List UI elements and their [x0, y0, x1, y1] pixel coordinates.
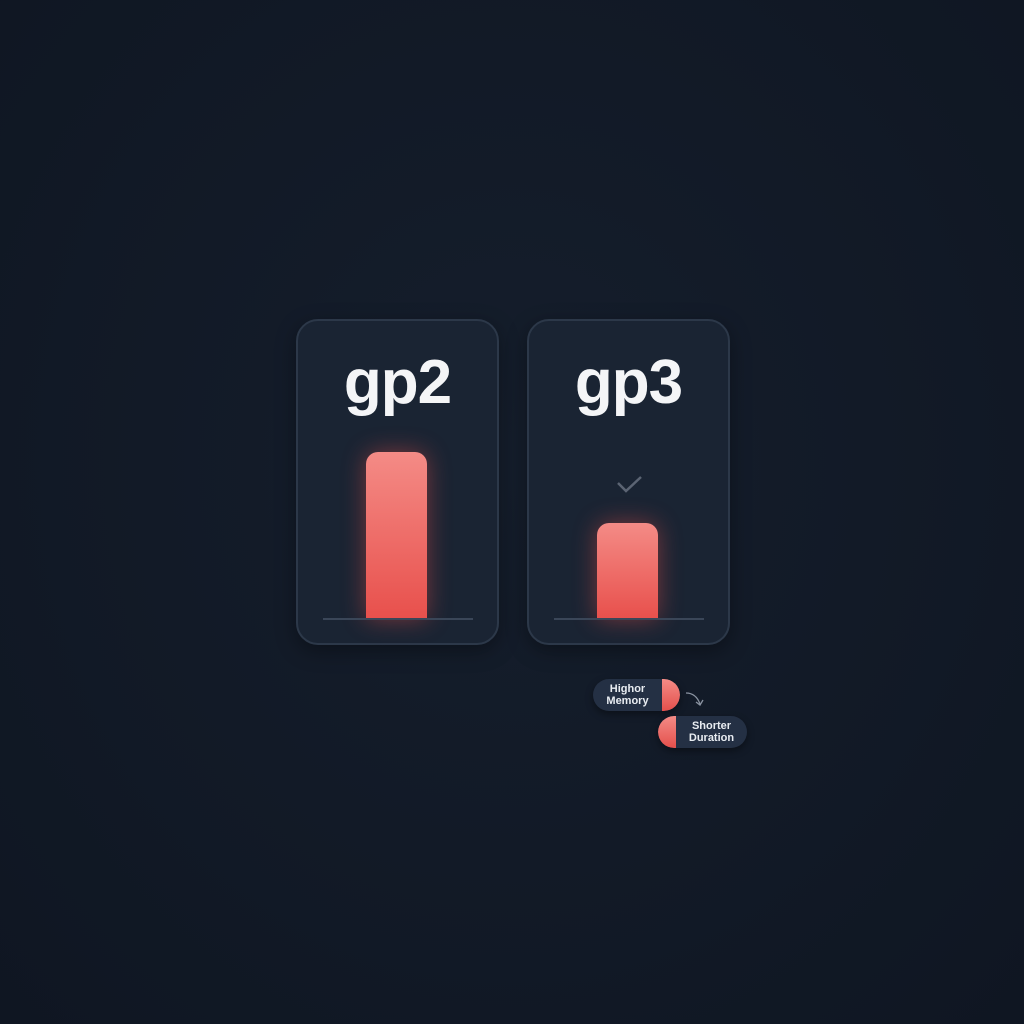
title: gp3: gp3	[575, 348, 682, 417]
pill: Shorter Duration: Shorter	[692, 720, 731, 732]
panel: gp3	[527, 319, 730, 645]
pill: Shorter Duration: Duration	[689, 732, 734, 744]
pill: Higher Memory: Highor	[610, 683, 645, 695]
icon: checkmark	[617, 476, 642, 493]
panel: gp2	[296, 319, 499, 645]
pill: Higher Memory	[593, 679, 680, 711]
title: gp2: gp2	[344, 348, 451, 417]
bar: gp3 short	[597, 523, 658, 619]
pill: Higher Memory: Memory	[606, 695, 649, 707]
bar: gp2 tall	[366, 452, 427, 619]
pill: Shorter Duration	[658, 716, 747, 748]
arrow	[686, 692, 704, 706]
